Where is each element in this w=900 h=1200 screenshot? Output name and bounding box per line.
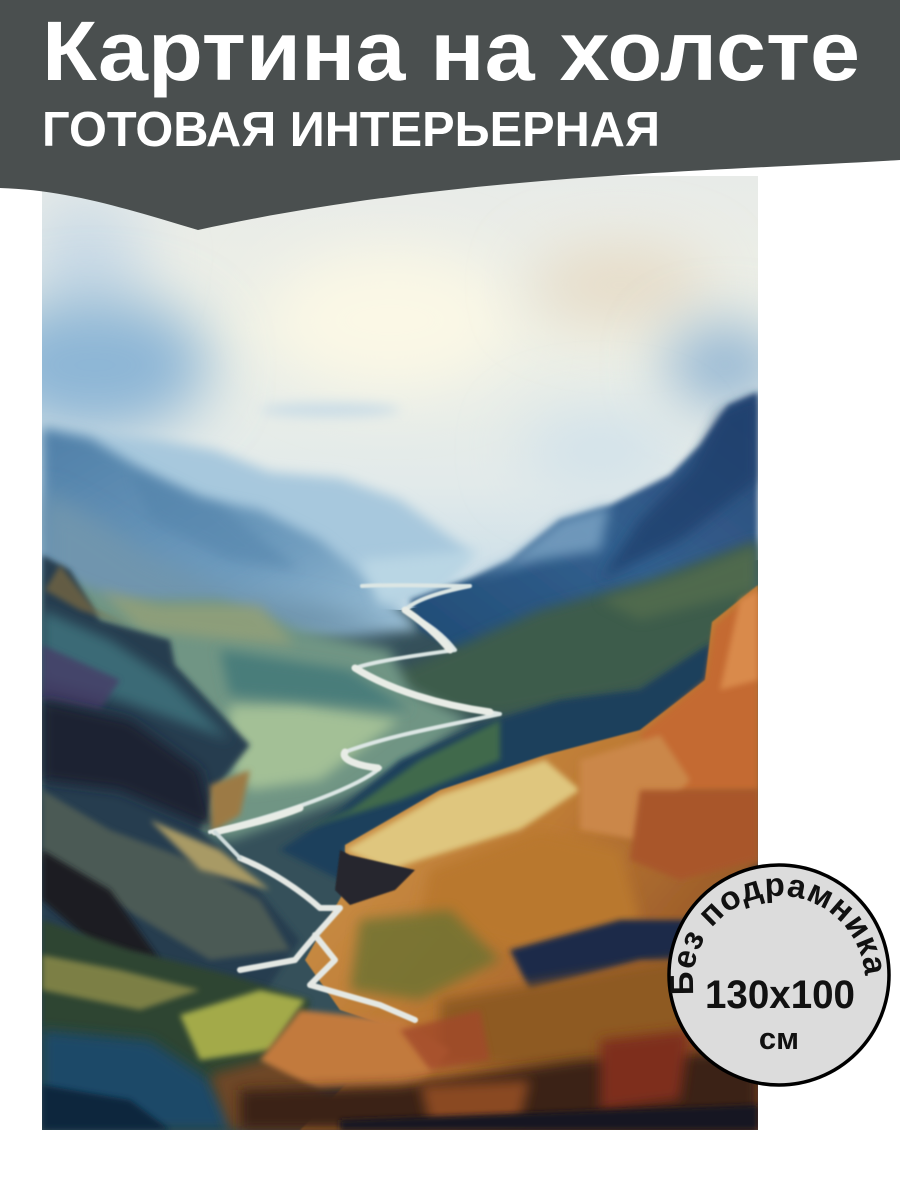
header banner [0, 0, 900, 230]
valley base fill [42, 560, 758, 1130]
badge size: 130x100 [705, 973, 855, 1017]
sky [42, 176, 758, 610]
orange hillside [240, 585, 758, 1130]
curved badge text: Без подрамника [670, 878, 882, 994]
distant mountains, left [42, 425, 480, 660]
painting: mountain valley landscape [0, 176, 785, 1130]
right dark blue mountains [390, 392, 758, 715]
green valley floor [42, 570, 470, 840]
river [210, 585, 500, 1020]
lower-left foreground [42, 920, 340, 1130]
title: Картина на холсте [42, 4, 860, 98]
badge unit: см [759, 1021, 799, 1056]
dark blue ridge, right centre [280, 642, 709, 880]
subtitle: ГОТОВАЯ ИНТЕРЬЕРНАЯ [42, 103, 660, 157]
left dark hillside [42, 552, 299, 986]
badge: size and no stretcher [667, 863, 891, 1087]
dark rock [335, 850, 415, 905]
